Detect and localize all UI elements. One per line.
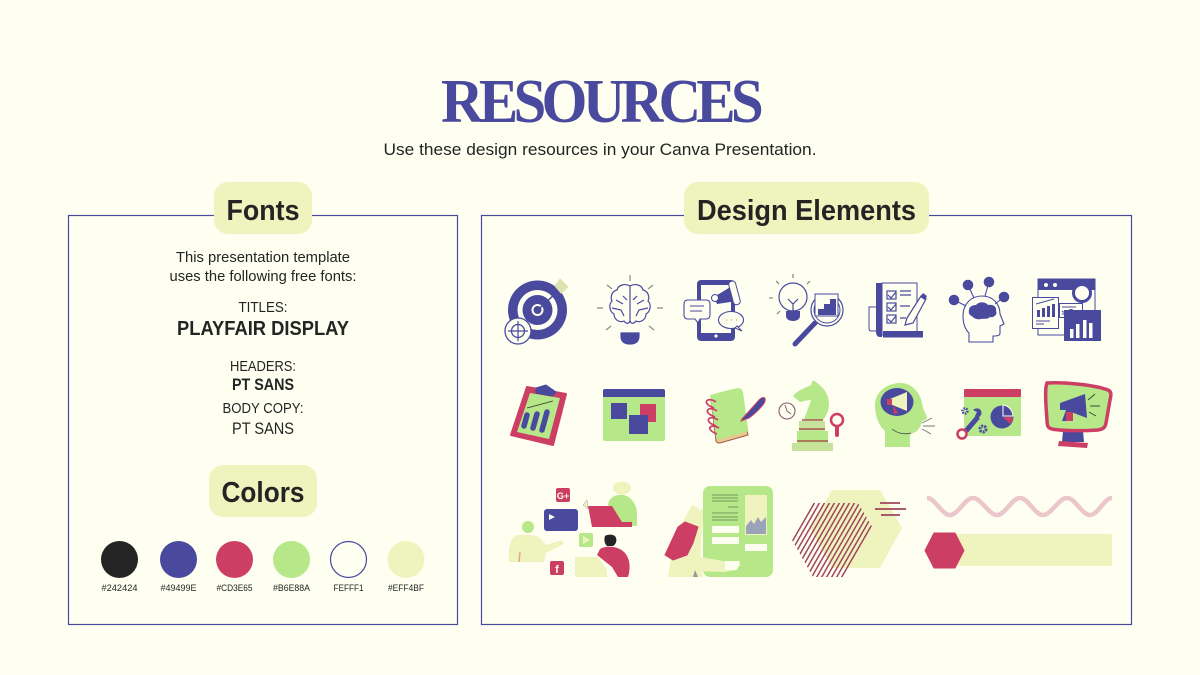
text block: font intro [170,249,356,285]
text block: font intro: uses the following free fonts: [170,268,356,285]
element: striped hexagons [792,490,906,577]
figure: person at laptop [575,535,630,577]
text block: titles font [177,299,350,340]
color swatches: FEFFF1 [334,583,364,593]
text block: titles font: TITLES: [238,299,288,316]
text block: headers font: PT SANS [232,375,294,394]
text block: titles font: PLAYFAIR DISPLAY [177,318,350,340]
heading: colors [209,465,317,517]
panel: design elements [482,182,1132,624]
icon: wrench and pie window [958,389,1021,438]
icon: speaking head [875,383,935,447]
icon: checklist and pencil [869,283,927,338]
icon: bulb and magnifier [769,274,843,344]
heading: fonts: Fonts [226,195,300,227]
heading: design elements [684,182,929,234]
title: RESOURCES [441,68,761,136]
element: wavy line [927,498,1112,515]
color swatches [101,541,424,593]
icon: video player [544,509,578,531]
text block: body font [222,400,304,438]
text block: font intro: This presentation template [176,249,350,266]
icon: monitor megaphone [1046,383,1111,448]
icon: target [505,279,568,344]
icon: google plus badge: G+ [557,491,569,501]
panel border: design elements [482,216,1132,624]
icon: phone marketing [684,280,744,341]
heading: fonts [214,182,312,234]
icon: clipboard chart [511,385,566,445]
text block: headers font: HEADERS: [230,358,296,375]
panel border: fonts [68,216,458,624]
heading: colors: Colors [222,477,304,509]
color swatches: #B6E88A [273,583,310,593]
figure: woman body [668,505,704,577]
text block: body font: BODY COPY: [222,400,304,417]
text block: body font: PT SANS [232,419,294,438]
figure: woman arm and hair [665,505,741,577]
subtitle: Use these design resources in your Canva Presentation. [384,140,816,159]
element: banner with hexagon [925,533,1112,568]
icon: play badge [579,533,593,547]
slide canvas [68,80,1132,626]
presentation board [703,486,773,577]
icon: window with squares [603,389,665,441]
icon: analytics dashboard [1032,279,1101,341]
icon: chess knight [779,380,843,451]
illustration: social media team [509,482,637,577]
icon: facebook badge: f [555,564,559,576]
color swatches: #49499E [160,583,196,593]
text block: headers font [230,358,296,394]
heading: design elements: Design Elements [697,195,916,227]
color swatches: #CD3E65 [216,583,252,593]
icon: head with network [949,277,1009,342]
figure: person left [509,521,564,562]
icon: notebook and pen [706,388,765,443]
panel: fonts and colors [68,182,458,624]
illustration: woman presenting board [665,486,773,577]
color swatches: #EFF4BF [388,583,424,593]
color swatches: #242424 [102,583,138,593]
icon: brain bulb [597,275,663,344]
figure: person with laptop top [583,482,637,527]
